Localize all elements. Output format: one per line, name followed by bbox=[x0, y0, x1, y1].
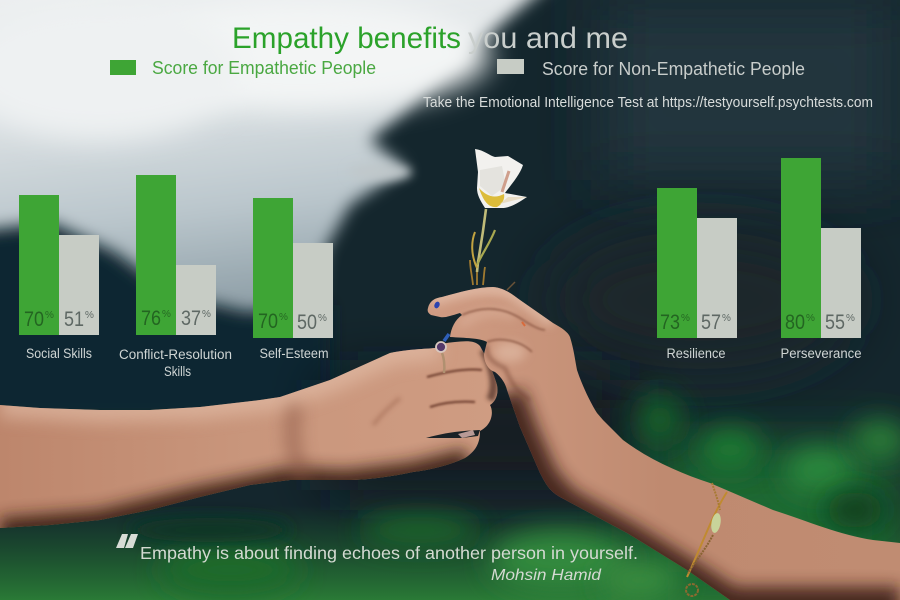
icon: bracelet bbox=[686, 483, 727, 596]
bar chart: Self-Esteem: 50 bbox=[297, 311, 317, 334]
photo: flower bbox=[470, 149, 527, 290]
bar chart: Conflict-Resolution Skills bbox=[119, 175, 232, 379]
bar chart: Social Skills: % bbox=[85, 310, 94, 321]
bar chart: Social Skills bbox=[19, 195, 99, 361]
bar chart: Resilience bbox=[657, 188, 737, 361]
bar chart: Social Skills: 70 bbox=[24, 308, 44, 331]
bar chart: Conflict-Resolution Skills: % bbox=[202, 309, 211, 320]
title: Empathy benefits bbox=[232, 22, 461, 55]
bar chart: Perseverance: Perseverance bbox=[780, 346, 862, 361]
bar chart: Resilience: % bbox=[722, 313, 731, 324]
icon: blue nail bbox=[433, 301, 441, 309]
title bbox=[232, 22, 628, 55]
bar chart: Social Skills: 51 bbox=[64, 308, 84, 331]
bar chart: Self-Esteem: Self-Esteem bbox=[260, 346, 328, 361]
photo: left arm and hand bbox=[0, 341, 498, 536]
title: you and me bbox=[468, 22, 628, 55]
bar chart: Self-Esteem: % bbox=[279, 312, 288, 323]
bar chart: Conflict-Resolution Skills: Conflict-Resolution bbox=[119, 347, 232, 362]
bar chart: Resilience: 57 bbox=[701, 311, 721, 334]
icon: ring bbox=[436, 334, 449, 373]
bar chart: Resilience: Resilience bbox=[666, 346, 726, 361]
bar chart: Conflict-Resolution Skills: 37 bbox=[181, 307, 201, 330]
legend: non-empathetic: Score for Non-Empathetic People bbox=[542, 59, 805, 79]
icon: quotation mark bbox=[116, 534, 138, 548]
gap between fingers bbox=[426, 430, 480, 438]
bar chart: Social Skills: Social Skills bbox=[26, 346, 92, 361]
bar chart: Conflict-Resolution Skills: Skills bbox=[164, 364, 191, 379]
bar chart: Self-Esteem bbox=[253, 198, 333, 361]
bar chart: Conflict-Resolution Skills: 76 bbox=[141, 307, 161, 330]
quote attribution: Mohsin Hamid bbox=[491, 567, 602, 584]
bar chart: Social Skills: % bbox=[45, 310, 54, 321]
bar chart: Perseverance: % bbox=[846, 313, 855, 324]
bar chart: Perseverance: 55 bbox=[825, 311, 845, 334]
bar chart: Conflict-Resolution Skills: % bbox=[162, 309, 171, 320]
bar chart: Resilience: 73 bbox=[660, 311, 680, 334]
photo: right arm and hand bbox=[428, 287, 900, 600]
bar chart: Self-Esteem: 70 bbox=[258, 310, 278, 333]
test link text: Take the Emotional Intelligence Test at https://testyourself.psychtests.com bbox=[423, 95, 873, 111]
bar chart: Resilience: % bbox=[681, 313, 690, 324]
bar chart: Perseverance: % bbox=[806, 313, 815, 324]
bar chart: Perseverance: 80 bbox=[785, 311, 805, 334]
bar chart: Self-Esteem: % bbox=[318, 313, 327, 324]
quote: Empathy is about finding echoes of another person in yourself. bbox=[140, 543, 638, 563]
bar chart: Perseverance bbox=[780, 158, 862, 361]
legend: empathetic: Score for Empathetic People bbox=[152, 58, 376, 78]
